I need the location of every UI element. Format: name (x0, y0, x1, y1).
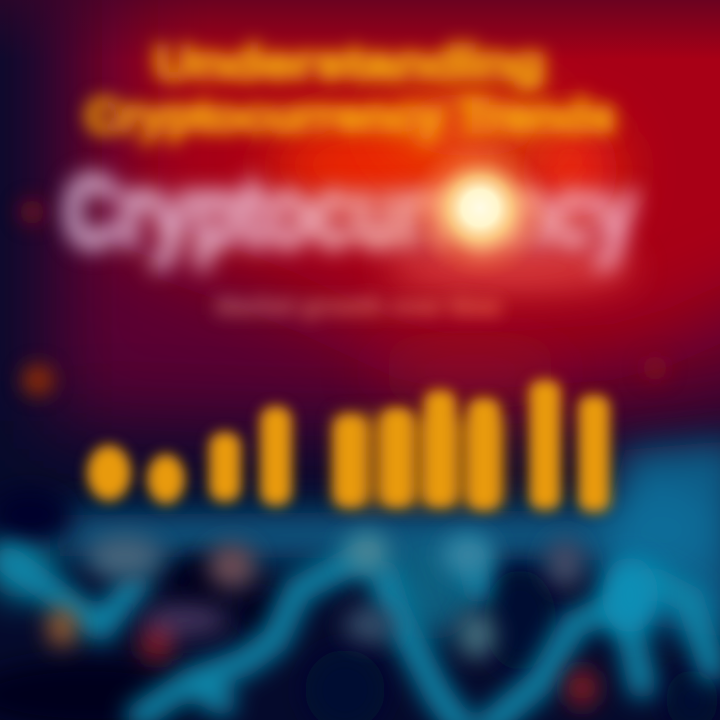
dark valleys (0, 490, 718, 720)
subtitle: Market growth over time (216, 293, 500, 320)
network wave lines (8, 553, 712, 720)
bar chart (87, 380, 610, 512)
teal market band at bottom (0, 440, 720, 640)
grey and red chart blobs (48, 532, 597, 708)
bright right peak (602, 557, 658, 633)
sun flare (408, 136, 552, 280)
red streak under heading (385, 246, 635, 290)
title line 1: Understanding (154, 36, 546, 89)
title line 2: Cryptocurrency Trends (86, 89, 616, 142)
bar halo (335, 415, 505, 505)
orange nodes (19, 199, 668, 396)
